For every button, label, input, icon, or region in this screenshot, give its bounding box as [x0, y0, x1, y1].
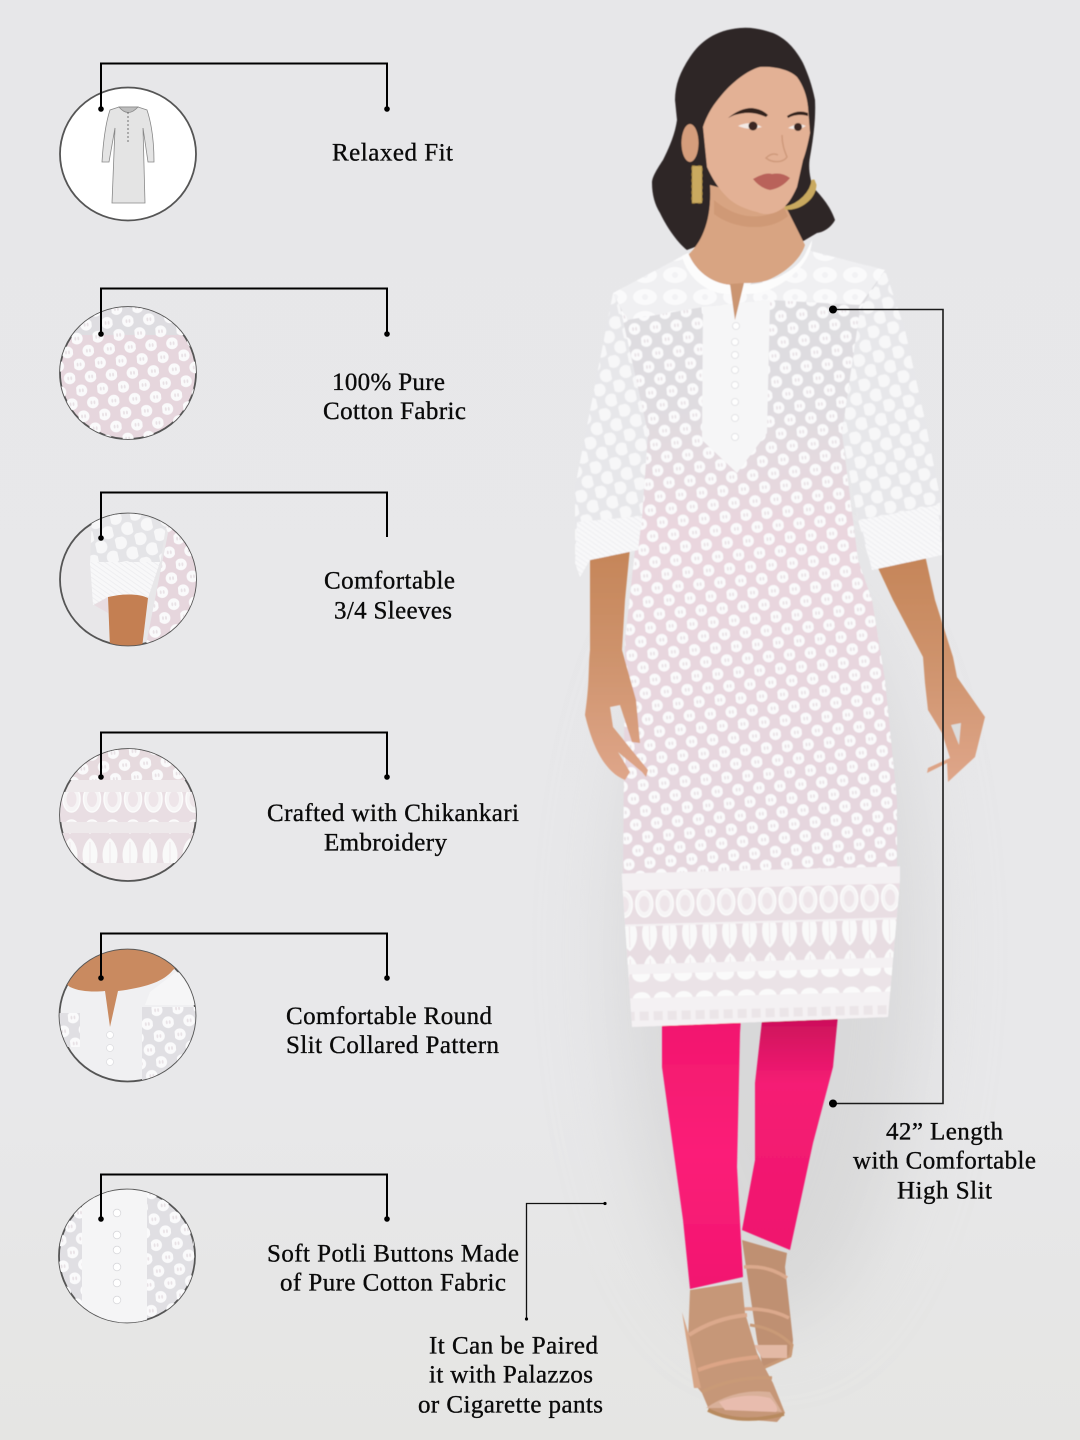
bracket	[98, 732, 390, 780]
front foot and sandal	[682, 1282, 785, 1422]
neck shadow	[714, 200, 788, 227]
bracket	[98, 64, 390, 112]
label: 42” Length	[886, 1118, 1004, 1146]
kurta dots	[613, 250, 897, 1027]
bracket	[98, 934, 390, 981]
lips	[753, 174, 790, 190]
circle: sleeve crop	[60, 513, 197, 650]
neck and chest	[688, 185, 805, 287]
face	[703, 67, 810, 214]
label: Crafted with Chikankari	[267, 800, 519, 827]
feature 6: buttons	[58, 1174, 519, 1324]
feature 4: embroidery	[58, 732, 519, 881]
bracket	[98, 492, 387, 541]
potli buttons	[732, 322, 740, 440]
kurta left sleeve	[575, 293, 648, 577]
label: Soft Potli Buttons Made	[267, 1240, 519, 1268]
right eyebrow	[787, 112, 808, 118]
label: It Can be Paired	[429, 1332, 598, 1360]
circle: embroidery crop	[58, 748, 198, 881]
right legging	[742, 1012, 838, 1250]
bracket	[98, 288, 390, 337]
collar	[682, 240, 812, 294]
label	[853, 1118, 1036, 1204]
hem embroidery	[622, 866, 900, 1027]
circle: neckline crop	[55, 945, 198, 1083]
right arm and hand	[878, 555, 985, 782]
kurta right sleeve	[842, 270, 942, 570]
ear	[682, 124, 698, 162]
bracket	[829, 306, 943, 1108]
right earring	[785, 180, 815, 208]
bracket	[98, 1174, 390, 1222]
label: with Comfortable	[853, 1148, 1036, 1174]
label: High Slit	[897, 1178, 992, 1204]
feature 3: sleeves	[60, 492, 455, 650]
label	[324, 568, 455, 624]
left legging	[662, 1018, 743, 1289]
feature 1: relaxed fit	[60, 64, 453, 220]
rear foot and sandal	[742, 1240, 793, 1368]
label	[267, 800, 519, 856]
hair	[652, 28, 835, 250]
left eye	[738, 122, 762, 130]
circle: fabric swatch	[60, 305, 196, 441]
right eye	[788, 123, 806, 131]
yoke embroidery	[613, 250, 885, 320]
label	[267, 1240, 519, 1296]
label: Slit Collared Pattern	[286, 1032, 500, 1059]
label: Embroidery	[324, 830, 448, 856]
label	[323, 369, 466, 425]
circle: buttons crop	[58, 1188, 196, 1324]
label: Comfortable Round	[286, 1003, 492, 1030]
placket	[702, 300, 770, 473]
callout: pairing	[418, 1202, 607, 1418]
label: 3/4 Sleeves	[334, 598, 452, 624]
label: Cotton Fabric	[323, 398, 466, 425]
left eyebrow	[728, 108, 768, 118]
bracket	[525, 1202, 607, 1321]
label: Relaxed Fit	[332, 140, 453, 166]
label: or Cigarette pants	[418, 1392, 603, 1418]
feature 2: cotton fabric	[60, 288, 466, 441]
feature 5: collar	[55, 934, 500, 1083]
label: of Pure Cotton Fabric	[280, 1270, 506, 1296]
kurta body	[613, 250, 897, 1027]
left arm and hand	[585, 548, 648, 780]
slit	[730, 283, 744, 320]
label	[418, 1332, 603, 1418]
circle: garment sketch	[60, 88, 196, 220]
label: Comfortable	[324, 568, 455, 594]
left earring	[692, 166, 702, 203]
label: it with Palazzos	[429, 1362, 593, 1388]
model photo	[575, 28, 985, 1422]
nose	[766, 135, 787, 162]
label: 100% Pure	[332, 369, 445, 396]
label	[286, 1003, 500, 1059]
callout: length	[829, 306, 1036, 1204]
backdrop shading	[620, 570, 920, 1330]
